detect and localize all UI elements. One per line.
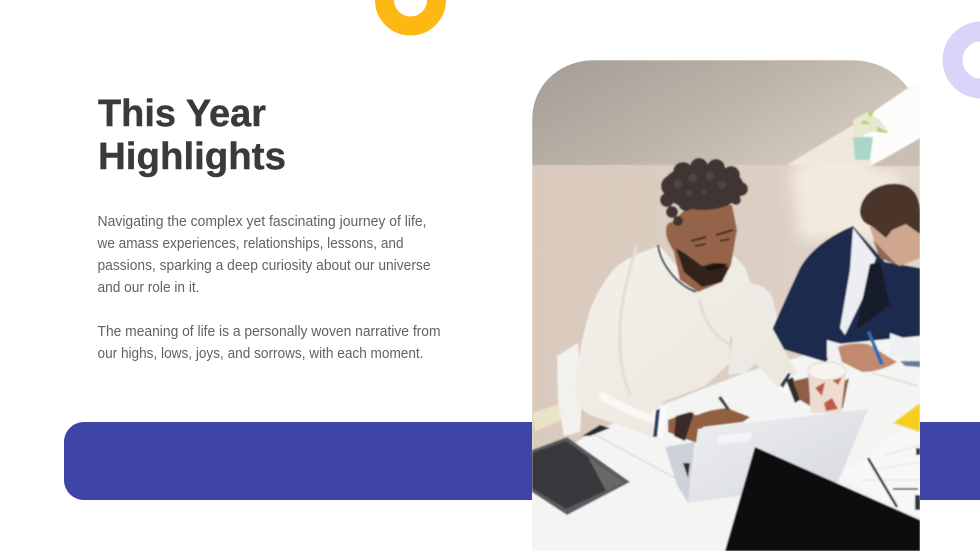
blue band	[64, 422, 980, 500]
neck and face	[666, 205, 737, 292]
man on the right	[772, 184, 920, 386]
plant	[853, 110, 889, 160]
ceiling corner	[873, 138, 920, 166]
title: This Year	[98, 93, 266, 135]
body text: we amass experiences, relationships, lessons, and	[97, 236, 404, 252]
outlet	[533, 403, 562, 431]
body text: and our role in it.	[98, 280, 200, 296]
skylight	[870, 85, 920, 165]
cup	[808, 370, 846, 413]
papers and glasses	[838, 403, 920, 517]
body text: The meaning of life is a personally woven narrative from	[98, 324, 440, 340]
wall	[532, 160, 920, 460]
chair left	[557, 343, 582, 436]
black laptop	[725, 447, 920, 551]
body text: our highs, lows, joys, and sorrows, with each moment.	[98, 346, 424, 362]
photo: office team at work	[532, 60, 920, 551]
table	[532, 320, 920, 551]
body text: passions, sparking a deep curiosity about our universe	[98, 258, 430, 274]
body text: Navigating the complex yet fascinating journey of life,	[98, 214, 426, 230]
lavender ring	[952, 32, 980, 88]
silver laptop	[665, 409, 868, 503]
ceiling	[532, 60, 920, 165]
man in white sweater	[575, 158, 849, 443]
watch	[786, 377, 800, 403]
title	[98, 93, 286, 178]
writing hand and bracelet	[668, 408, 750, 443]
title: Highlights	[98, 136, 286, 178]
curly hair	[660, 158, 748, 226]
sunlit slope	[788, 126, 870, 165]
collar	[658, 245, 696, 292]
tablet	[532, 437, 630, 515]
cup hand	[793, 377, 849, 410]
body text	[97, 214, 440, 362]
chair back right	[728, 283, 778, 375]
yellow ring	[384, 0, 436, 26]
light on wall	[788, 164, 902, 243]
